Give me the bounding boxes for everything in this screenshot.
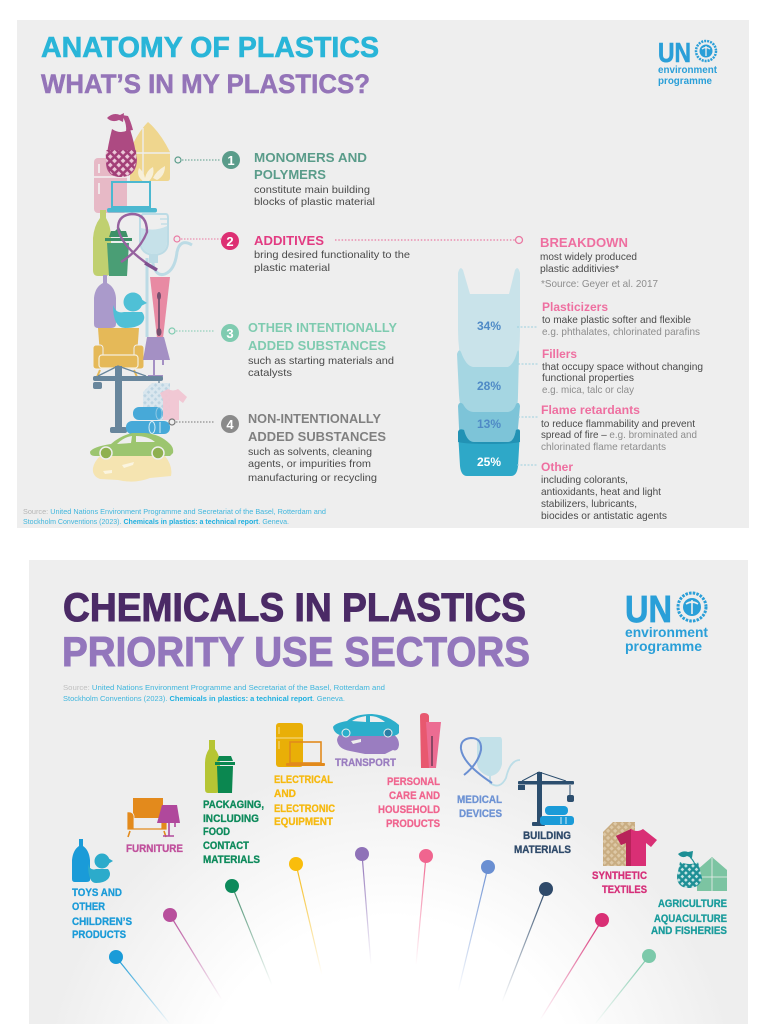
icon: sofa and lamp: [127, 798, 180, 837]
breakdown heading: most widely produced: [540, 251, 637, 263]
sector: packaging: FOOD: [203, 826, 230, 838]
sector: agriculture: AND FISHERIES: [651, 925, 727, 937]
sector: synthetic textiles: TEXTILES: [602, 884, 647, 896]
source note: [23, 507, 326, 526]
icon: green car: [90, 433, 173, 459]
connector 3: [169, 328, 214, 334]
sector: synthetic textiles: [540, 822, 657, 1020]
item 4: non-intentionally added substances: such as solvents, cleaning: [248, 446, 372, 458]
cup 25%: 25%: [477, 455, 501, 469]
logo: UN environment programme: environment: [658, 64, 717, 76]
plasticizers text: e.g. phthalates, chlorinated parafins: [542, 326, 700, 338]
item 4: non-intentionally added substances: [221, 411, 386, 484]
cup 13%: 13%: [477, 417, 501, 431]
sector: transport: TRANSPORT: [335, 757, 396, 769]
source note: Stockholm Conventions (2023). Chemicals in plastics: a technical report. Geneva.: [63, 694, 345, 703]
breakdown heading: plastic additivies*: [540, 263, 619, 275]
sector: building materials: BUILDING: [523, 830, 571, 842]
cup 28%: 28%: [477, 379, 501, 393]
logo: UN environment programme: programme: [625, 638, 702, 654]
icon: IV bag and ribbon: [461, 737, 520, 786]
sector: building materials: MATERIALS: [514, 844, 571, 856]
panel: anatomy of plastics: [17, 20, 749, 528]
connector 1: [175, 157, 221, 163]
sector: personal care: CARE AND: [389, 790, 440, 802]
sector: toys: PRODUCTS: [72, 929, 126, 941]
connector 4: [169, 419, 214, 425]
source note: [63, 683, 385, 703]
item 4: non-intentionally added substances: NON-INTENTIONALLY: [248, 411, 381, 426]
icon: rubber duck: [113, 292, 147, 328]
icon: textile and shirt: [143, 383, 187, 420]
fillers text: e.g. mica, talc or clay: [542, 384, 635, 396]
item 2: additives: plastic material: [254, 262, 330, 274]
icon: crane: [93, 366, 163, 433]
plasticizers text: Plasticizers: [542, 300, 608, 314]
fillers text: functional properties: [542, 372, 634, 384]
icon: ribbon: [118, 214, 157, 270]
sector: furniture: [126, 798, 222, 1000]
item 3: other intentionally added substances: such as starting materials and: [248, 355, 394, 367]
flame retardants text: [541, 403, 697, 453]
item 2: additives: ADDITIVES: [254, 233, 324, 248]
sector: synthetic textiles: SYNTHETIC: [592, 870, 647, 882]
breakdown heading: BREAKDOWN: [540, 235, 628, 250]
other text: biocides or antistatic agents: [541, 510, 667, 522]
breakdown heading: *Source: Geyer et al. 2017: [541, 278, 658, 290]
sector: furniture: FURNITURE: [126, 843, 183, 855]
sector: electrical and electronic: AND: [274, 788, 296, 800]
logo: UN environment programme: environment: [625, 624, 708, 640]
sector: packaging: PACKAGING,: [203, 799, 264, 811]
flame retardants text: to reduce flammability and prevent: [541, 418, 695, 430]
flame retardants text: Flame retardants: [541, 403, 640, 417]
other text: [541, 460, 667, 522]
item 2: additives: [221, 232, 522, 274]
fillers text: Fillers: [542, 347, 577, 361]
sector: personal care: PRODUCTS: [386, 818, 440, 830]
icon stack: plastic products: [90, 113, 221, 482]
icon: fabric and shirt: [603, 822, 657, 866]
icon: fish bag and greenhouse: [677, 851, 727, 891]
icon: fish and net bag: [106, 113, 137, 177]
logo: UN environment programme: programme: [658, 75, 712, 87]
logo: UN environment programme: UN: [625, 589, 672, 631]
sector: toys: OTHER: [72, 901, 105, 913]
sector: toys: TOYS AND: [72, 887, 122, 899]
item 4: non-intentionally added substances: 4: [226, 417, 234, 432]
sector: electrical and electronic: EQUIPMENT: [274, 816, 333, 828]
panel: priority use sectors: [29, 560, 748, 1024]
icon: greenhouse: [130, 122, 170, 181]
item 1: monomers and polymers: MONOMERS AND: [254, 150, 367, 165]
icon: bottle and duck: [72, 839, 113, 883]
item 3: other intentionally added substances: OTHER INTENTIONALLY: [248, 320, 397, 335]
icon: bottle: [93, 210, 111, 276]
plasticizers text: to make plastic softer and flexible: [542, 314, 691, 326]
icon: comb and leg: [420, 713, 441, 768]
title: chemicals in plastics: CHEMICALS IN PLASTICS: [63, 586, 526, 630]
cup 13%: [458, 403, 520, 443]
sector: medical devices: DEVICES: [459, 808, 502, 820]
flame retardants text: chlorinated flame retardants: [541, 441, 666, 453]
cup 34%: [458, 268, 520, 372]
sector: packaging: [203, 740, 272, 985]
sector: electrical and electronic: ELECTRICAL: [274, 774, 333, 786]
title: anatomy of plastics: ANATOMY OF PLASTICS: [41, 32, 379, 64]
subtitle: what's in my plastics: WHAT’S IN MY PLASTICS?: [41, 69, 370, 99]
sector: agriculture: [595, 851, 727, 1024]
source note: Source: United Nations Environment Programme and Secretariat of the Basel, Rotterdam and: [63, 683, 385, 692]
item 1: monomers and polymers: blocks of plastic material: [254, 196, 375, 208]
icon: cup: [105, 227, 132, 276]
icon: fridge and laptop: [276, 723, 325, 767]
sector: agriculture: AQUACULTURE: [654, 913, 727, 925]
logo: UN environment programme: [658, 37, 717, 87]
icon: IV bag: [140, 214, 192, 337]
other text: antioxidants, heat and light: [541, 486, 661, 498]
item 3: other intentionally added substances: ADDED SUBSTANCES: [248, 338, 386, 353]
item 4: non-intentionally added substances: manufacturing or recycling: [248, 472, 377, 484]
chart: stacked cups breakdown: [457, 268, 538, 476]
icon: fridge: [94, 158, 127, 213]
icon: yellow car: [93, 456, 171, 482]
item 4: non-intentionally added substances: ADDED SUBSTANCES: [248, 429, 386, 444]
sector: packaging: CONTACT: [203, 840, 249, 852]
sector: personal care: PERSONAL: [387, 776, 440, 788]
cup 25%: [458, 429, 520, 476]
sector: toys: CHILDREN’S: [72, 916, 132, 928]
fillers text: [542, 347, 703, 396]
sector: packaging: MATERIALS: [203, 854, 260, 866]
item 3: other intentionally added substances: 3: [226, 326, 234, 341]
item 1: monomers and polymers: 1: [227, 153, 235, 168]
icon: pink leg: [150, 277, 170, 338]
sector: medical devices: [457, 737, 520, 992]
icon: milk bottle: [94, 275, 116, 328]
source note: Stockholm Conventions (2023). Chemicals in plastics: a technical report. Geneva.: [23, 517, 289, 526]
breakdown heading: [540, 235, 658, 290]
logo: UN environment programme: [625, 589, 708, 654]
item 2: additives: bring desired functionality to the: [254, 249, 410, 261]
item 3: other intentionally added substances: [221, 320, 397, 379]
icon: cars: [333, 714, 399, 754]
item 2: additives: 2: [226, 234, 234, 249]
item 3: other intentionally added substances: catalysts: [248, 367, 292, 379]
subtitle: priority use sectors: PRIORITY USE SECTORS: [62, 628, 530, 675]
icon: pipes: [126, 407, 170, 434]
item 1: monomers and polymers: constitute main building: [254, 184, 370, 196]
sector: agriculture: AGRICULTURE: [658, 898, 727, 910]
item 4: non-intentionally added substances: agents, or impurities from: [248, 458, 371, 470]
sector: transport: [333, 714, 399, 965]
item 1: monomers and polymers: POLYMERS: [254, 167, 326, 182]
icon: lamp: [143, 337, 170, 377]
icon: laptop: [107, 182, 157, 212]
other text: stabilizers, lubricants,: [541, 498, 637, 510]
sector: electrical and electronic: ELECTRONIC: [274, 803, 335, 815]
icon: armchair: [93, 328, 144, 377]
item 1: monomers and polymers: [222, 150, 375, 208]
sector: toys: [72, 839, 170, 1024]
icon: crane and pipes: [518, 772, 574, 826]
other text: Other: [541, 460, 573, 474]
logo: UN environment programme: UN: [658, 37, 691, 68]
cup 34%: 34%: [477, 319, 501, 333]
other text: including colorants,: [541, 474, 628, 486]
fillers text: that occupy space without changing: [542, 361, 703, 373]
cup 28%: [457, 350, 519, 412]
sector: electrical and electronic: [274, 723, 335, 975]
sector: packaging: INCLUDING: [203, 813, 259, 825]
flame retardants text: spread of fire – e.g. brominated and: [541, 429, 697, 441]
sector: medical devices: MEDICAL: [457, 794, 502, 806]
sector: building materials: [502, 772, 574, 1002]
icon: bottle and cup: [205, 740, 235, 793]
sector: personal care: [378, 713, 441, 965]
connector 2: [174, 236, 221, 242]
plasticizers text: [542, 300, 700, 338]
source note: Source: United Nations Environment Programme and Secretariat of the Basel, Rotterdam and: [23, 507, 326, 516]
sector: personal care: HOUSEHOLD: [378, 804, 440, 816]
